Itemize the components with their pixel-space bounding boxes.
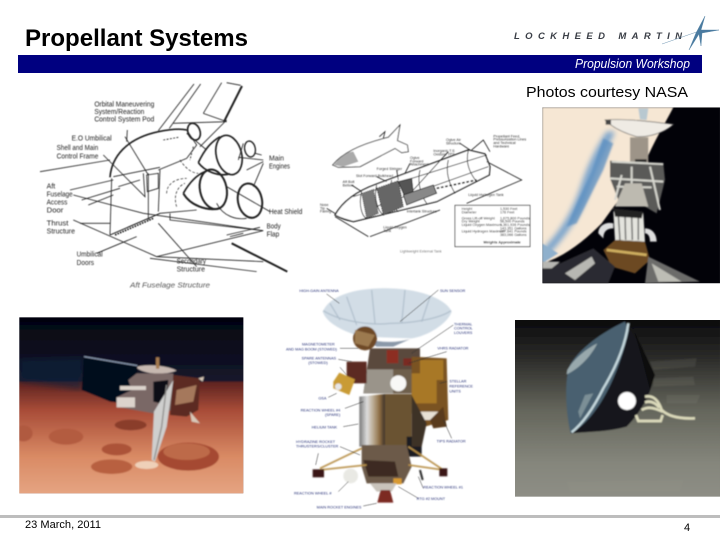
labels: Thrust — [47, 220, 68, 227]
logo: Lockheed Martin — [514, 16, 719, 50]
title: Propellant Systems — [25, 25, 248, 52]
labels: Engines — [269, 163, 290, 170]
data table: 1,530 Feet — [500, 207, 517, 211]
callouts and leader lines: SPARE ANTENNAS — [302, 356, 337, 360]
diagram: external tank and orbiter: Structure — [446, 142, 461, 146]
diagram: external tank and orbiter: Inorganic T.S — [433, 149, 455, 153]
callouts and leader lines: STELLAR — [449, 380, 467, 384]
diagram: external tank and orbiter: Forged Stringer — [377, 167, 403, 171]
labels: Doors — [77, 260, 94, 267]
diagram: external tank and orbiter: Nose — [320, 203, 329, 207]
data table: 383,066 Gallons — [500, 233, 527, 237]
labels: System/Reaction — [94, 109, 144, 116]
data table: 1,675,800 Pounds — [500, 216, 530, 220]
photo credit: Photos courtesy NASA — [526, 84, 688, 101]
callouts and leader lines: UNITS — [449, 389, 461, 393]
Earth — [542, 107, 673, 263]
diagram: external tank and orbiter: Fairing — [320, 210, 331, 214]
white disc — [618, 392, 636, 410]
labels: Secondary — [177, 258, 206, 265]
data table: 58,500 Pounds — [500, 220, 525, 224]
diagram: Cassini spacecraft — [286, 288, 473, 509]
diagram: external tank and orbiter: Pressurization Lines — [493, 138, 526, 142]
diagram: external tank and orbiter: Bellow — [343, 183, 354, 187]
callouts and leader lines: REFERENCE — [449, 384, 473, 388]
dish — [605, 120, 673, 137]
callouts and leader lines: RTG #2 MOUNT — [417, 497, 446, 501]
tank — [335, 150, 490, 222]
upper equipment — [363, 348, 420, 393]
labels: Main — [269, 156, 284, 163]
data table: 143,351 Gallons — [500, 226, 527, 230]
solar panel — [19, 357, 84, 390]
callouts and leader lines: VHRS RADIATOR — [437, 346, 469, 350]
data table: Diameter — [462, 210, 477, 214]
callouts and leader lines: AND MAG BOOM (STOWED) — [286, 348, 338, 352]
labels: Aft Fuselage Structure — [129, 282, 210, 289]
labels: Structure — [177, 267, 205, 274]
page number: 4 — [684, 522, 690, 534]
footer date: 23 March, 2011 — [25, 519, 101, 531]
callouts and leader lines: (STOWED) — [308, 361, 328, 365]
diagram: external tank and orbiter: Forward — [410, 159, 423, 163]
lower deck — [362, 445, 412, 483]
callouts and leader lines: REACTION WHEEL #1 — [423, 485, 463, 489]
callouts and leader lines: THRUSTERS/CLUSTER — [296, 445, 339, 449]
high-gain dish — [323, 288, 452, 338]
labels: E.O Umbilical — [72, 136, 112, 143]
callouts and leader lines: LOUVERS — [454, 331, 473, 335]
fuselage — [110, 129, 187, 177]
labels: Door — [47, 207, 64, 214]
diagram: external tank and orbiter: Ogive Air — [446, 138, 462, 142]
diagram: external tank and orbiter: Intertank Structure — [407, 210, 437, 214]
callouts and leader lines: REACTION WHEEL #4 — [301, 408, 341, 412]
legs — [320, 447, 443, 470]
payload bay — [542, 248, 615, 283]
labels: Umbilical — [77, 252, 103, 259]
callouts and leader lines: MAIN ROCKET ENGINES — [317, 505, 362, 509]
diagram: external tank and orbiter: Attachment — [410, 163, 428, 167]
callouts and leader lines: HELIUM TANK — [312, 425, 337, 429]
lower surfaces — [40, 160, 263, 257]
labels: Control Frame — [57, 153, 98, 160]
callouts and leader lines: SUN SENSOR — [440, 289, 466, 293]
footer rule — [0, 515, 720, 518]
solid motor — [613, 212, 645, 242]
photo: spacecraft above Earth — [542, 107, 720, 283]
gold blocks — [412, 357, 448, 427]
diagram: external tank and orbiter: Tip — [320, 206, 325, 210]
data table — [462, 207, 530, 244]
callouts and leader lines: (SPARE) — [325, 413, 341, 417]
data table: Weights Approximate — [483, 240, 521, 244]
photo: orbiter over Mars — [14, 314, 247, 497]
callouts and leader lines: TIPS RADIATOR — [437, 439, 466, 443]
diagram: external tank and orbiter: Hardware — [493, 144, 509, 148]
diagram: external tank and orbiter: Liquid Oxygen — [383, 225, 407, 229]
main engines — [198, 137, 220, 163]
capsule backshell — [572, 330, 652, 434]
labels: Orbital Maneuvering — [94, 102, 154, 109]
main cylinder — [359, 394, 385, 447]
diagram: external tank and orbiter — [320, 125, 530, 254]
header bar: Propulsion Workshop — [575, 57, 690, 71]
labels: Flap — [267, 232, 279, 239]
photo: probe capsule — [512, 317, 720, 500]
callouts and leader lines — [286, 289, 473, 509]
labels: Body — [267, 223, 281, 230]
capsule heat shield — [566, 322, 629, 433]
callouts and leader lines: GSA — [318, 396, 327, 400]
diagram: external tank and orbiter: Slot Forward Bulkhead — [356, 174, 393, 178]
callouts and leader lines: HIGH-GAIN ANTENNA — [299, 289, 339, 293]
spacecraft body — [137, 365, 177, 374]
truss — [610, 161, 665, 213]
orbiter — [333, 125, 408, 167]
labels: Aft — [47, 183, 55, 190]
diagram: external tank and orbiter: Oxidizer TPS — [433, 152, 455, 156]
callouts and leader lines: CONTROL — [454, 327, 473, 331]
data table: Gross Lift-off Weight — [462, 216, 495, 220]
diagram: external tank and orbiter: and Technical — [493, 141, 516, 145]
vertical tail lines — [158, 83, 241, 131]
diagram: external tank and orbiter: Lightweight External Tank — [400, 250, 442, 254]
diagram: external tank and orbiter: Ogive — [410, 156, 420, 160]
upper bus — [630, 137, 648, 163]
diagram: external tank and orbiter: Liquid Hydrogen Tank — [468, 193, 504, 197]
craters — [49, 429, 83, 445]
diagram: external tank and orbiter: Tank — [383, 229, 391, 233]
data table: 178 Feet — [500, 210, 514, 214]
logo: Lockheed Martin: LOCKHEED MARTIN — [514, 31, 683, 42]
labels — [47, 102, 302, 289]
labels: Shell and Main — [57, 145, 98, 152]
labels: Control System Pod — [94, 117, 154, 124]
data box — [455, 205, 530, 247]
callouts and leader lines: MAGNETOMETER — [302, 343, 335, 347]
parachute lines — [636, 396, 695, 421]
labels: Structure — [47, 228, 75, 235]
data table: Liquid Hydrogen Maximum — [462, 230, 505, 234]
diagram: aft fuselage structure — [40, 83, 302, 289]
callouts and leader lines: THERMAL — [454, 323, 472, 327]
data table: Height — [462, 207, 472, 211]
engine — [377, 490, 393, 503]
data table: Liquid Oxygen Maximum — [462, 223, 502, 227]
cradle — [603, 240, 650, 273]
leaders and dimensions — [327, 140, 522, 237]
labels: Access — [47, 199, 68, 206]
data table: 1,361,936 Pounds — [500, 223, 530, 227]
labels: Fuselage — [47, 191, 73, 198]
diagram: external tank and orbiter: Propellant Feed, — [493, 134, 520, 138]
header bar — [18, 55, 702, 73]
callouts and leader lines: HYDRAZINE ROCKET — [296, 440, 336, 444]
data table: 227,641 Pounds — [500, 230, 527, 234]
callouts and leader lines: REACTION WHEEL # — [294, 492, 332, 496]
antenna boom — [152, 380, 173, 462]
labels: Heat Shield — [269, 209, 302, 216]
diagram: external tank and orbiter: Aft Bolt — [343, 180, 354, 184]
shield highlights — [572, 323, 628, 432]
data table: Dry Weight — [462, 220, 480, 224]
